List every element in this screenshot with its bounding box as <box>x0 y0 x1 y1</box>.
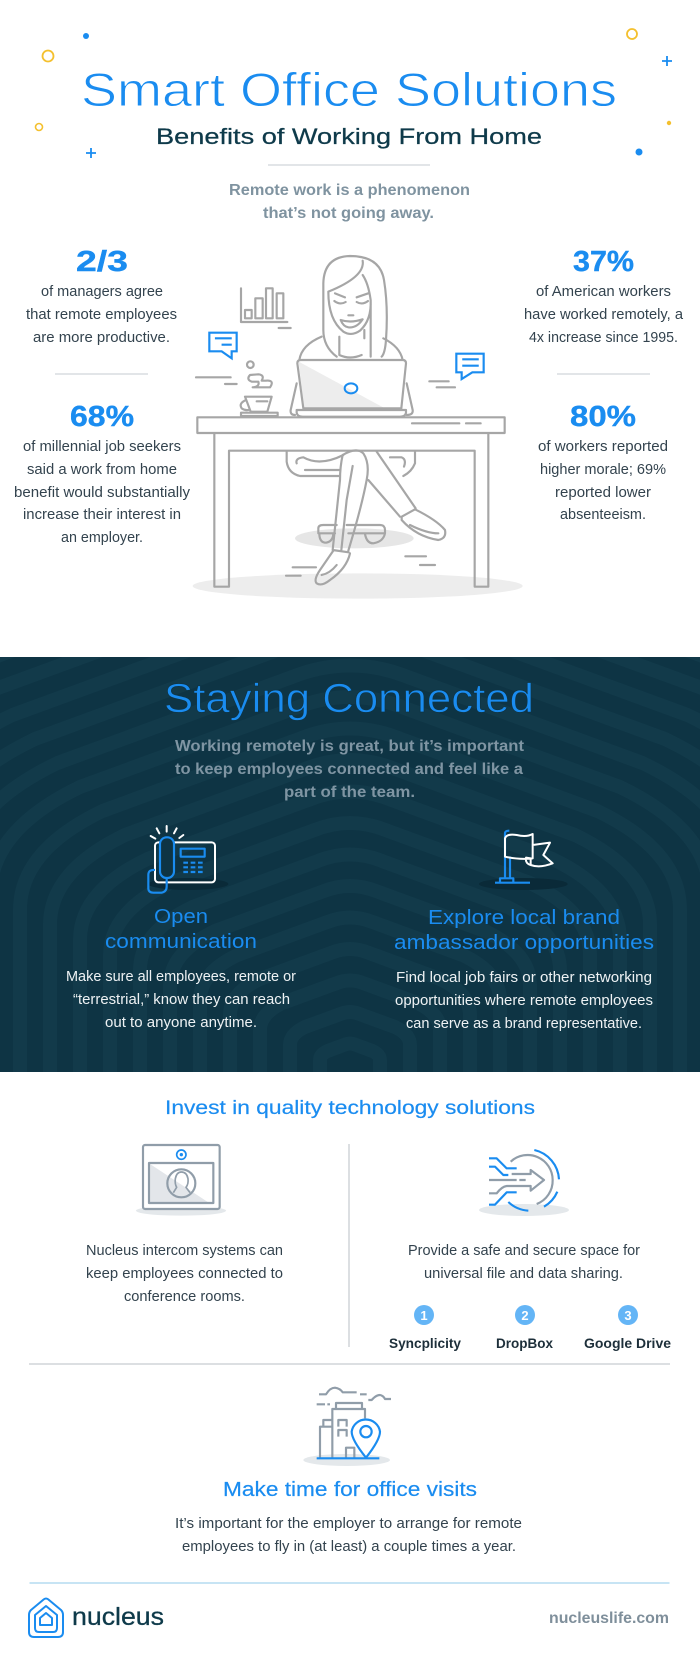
stat: 80% higher morale: absenteeism. <box>560 507 646 523</box>
office visits heading: Make time for office visits <box>223 1479 477 1501</box>
file sharing list: 2 <box>521 1308 529 1323</box>
section intro: part of the team. <box>284 784 415 801</box>
stat: 37% American workers: 4x increase since 1995. <box>529 330 678 346</box>
file sharing text <box>408 1243 640 1282</box>
logo: nucleus <box>29 1598 164 1637</box>
open communication card: out to anyone anytime. <box>105 1015 257 1031</box>
file sharing list <box>389 1305 671 1351</box>
office visits text <box>175 1516 522 1555</box>
stat: 2/3 of managers <box>26 246 177 346</box>
open communication card: communication <box>105 931 257 953</box>
stat: 68% millennial job seekers: an employer. <box>61 530 143 546</box>
office visits text: employees to fly in (at least) a couple times a year. <box>182 1539 516 1555</box>
stat: 2/3 of managers: that remote employees <box>26 307 177 323</box>
file sharing list: 3 <box>624 1308 632 1323</box>
stat: 68% millennial job seekers: said a work from home <box>27 462 177 478</box>
icon: telephone <box>148 826 228 893</box>
intro text <box>229 182 470 222</box>
stat: 68% millennial job seekers: of millennial job seekers <box>23 439 181 455</box>
section heading: Staying Connected <box>164 675 534 721</box>
chair and legs <box>286 450 445 584</box>
desk <box>197 417 505 587</box>
brand ambassador card: ambassador opportunities <box>394 932 654 954</box>
open communication card: Open <box>154 906 208 928</box>
panel: staying connected <box>0 657 700 1072</box>
stat: 37% American workers: have worked remotely, a <box>524 307 684 323</box>
open communication card: “terrestrial,” know they can reach <box>73 992 290 1008</box>
technology heading: Invest in quality technology solutions <box>165 1098 535 1119</box>
logo: nucleus: nucleus <box>72 1603 164 1631</box>
intercom text: Nucleus intercom systems can <box>86 1243 283 1259</box>
stat: 68% millennial job seekers: 68% <box>70 401 134 433</box>
stat: 37% American workers <box>524 246 684 346</box>
icon: intercom <box>136 1145 226 1216</box>
section intro: Working remotely is great, but it’s important <box>175 738 524 755</box>
laptop <box>297 360 406 417</box>
stat: 2/3 of managers: are more productive. <box>33 330 170 346</box>
chart doodle <box>241 288 291 328</box>
file sharing text: Provide a safe and secure space for <box>408 1243 640 1259</box>
header decorations <box>36 29 672 158</box>
title: Smart Office Solutions <box>81 63 617 116</box>
brand ambassador card: Explore local brand <box>428 907 620 929</box>
file sharing list: DropBox <box>496 1335 553 1351</box>
woman <box>291 256 413 415</box>
stat: 2/3 of managers: of managers agree <box>41 284 163 300</box>
file sharing list: Google Drive <box>584 1335 671 1351</box>
icon: flag <box>479 831 568 890</box>
intro text: that’s not going away. <box>263 205 434 222</box>
open communication card <box>66 906 296 1031</box>
intercom text <box>86 1243 283 1305</box>
stat: 68% millennial job seekers <box>14 401 191 546</box>
brand ambassador card: can serve as a brand representative. <box>406 1016 642 1032</box>
stat: 80% higher morale: 80% <box>570 401 636 433</box>
stat: 37% American workers: of American workers <box>536 284 671 300</box>
stat: 68% millennial job seekers: increase their interest in <box>23 507 181 523</box>
open communication card: Make sure all employees, remote or <box>66 969 296 985</box>
brand ambassador card <box>394 907 654 1032</box>
brand ambassador card: opportunities where remote employees <box>395 993 653 1009</box>
coffee cup <box>196 361 455 416</box>
office visits text: It’s important for the employer to arrange for remote <box>175 1516 522 1532</box>
brand ambassador card: Find local job fairs or other networking <box>396 970 652 986</box>
stat: 37% American workers: 37% <box>573 246 634 278</box>
stat: 80% higher morale: of workers reported <box>538 439 668 455</box>
intercom text: keep employees connected to <box>86 1266 283 1282</box>
section intro: to keep employees connected and feel like a <box>175 761 523 778</box>
file sharing list: Syncplicity <box>389 1335 461 1351</box>
illustration: woman working at desk <box>193 256 523 599</box>
icon: office building with pin <box>303 1388 391 1466</box>
stat: 80% higher morale <box>538 401 668 523</box>
speech bubble right <box>456 354 484 379</box>
section intro <box>175 738 524 801</box>
stat: 2/3 of managers: 2/3 <box>76 246 128 278</box>
intercom text: conference rooms. <box>124 1289 245 1305</box>
intro text: Remote work is a phenomenon <box>229 182 470 199</box>
subtitle: Benefits of Working From Home <box>156 124 542 149</box>
stat: 68% millennial job seekers: benefit would substantially <box>14 485 191 501</box>
icon: data transfer <box>479 1150 569 1216</box>
website url: nucleuslife.com <box>549 1610 669 1627</box>
speech bubble left <box>209 333 237 358</box>
stat: 80% higher morale: reported lower <box>555 485 651 501</box>
stat: 80% higher morale: higher morale; 69% <box>540 462 666 478</box>
file sharing list: 1 <box>420 1308 428 1323</box>
file sharing text: universal file and data sharing. <box>424 1266 623 1282</box>
